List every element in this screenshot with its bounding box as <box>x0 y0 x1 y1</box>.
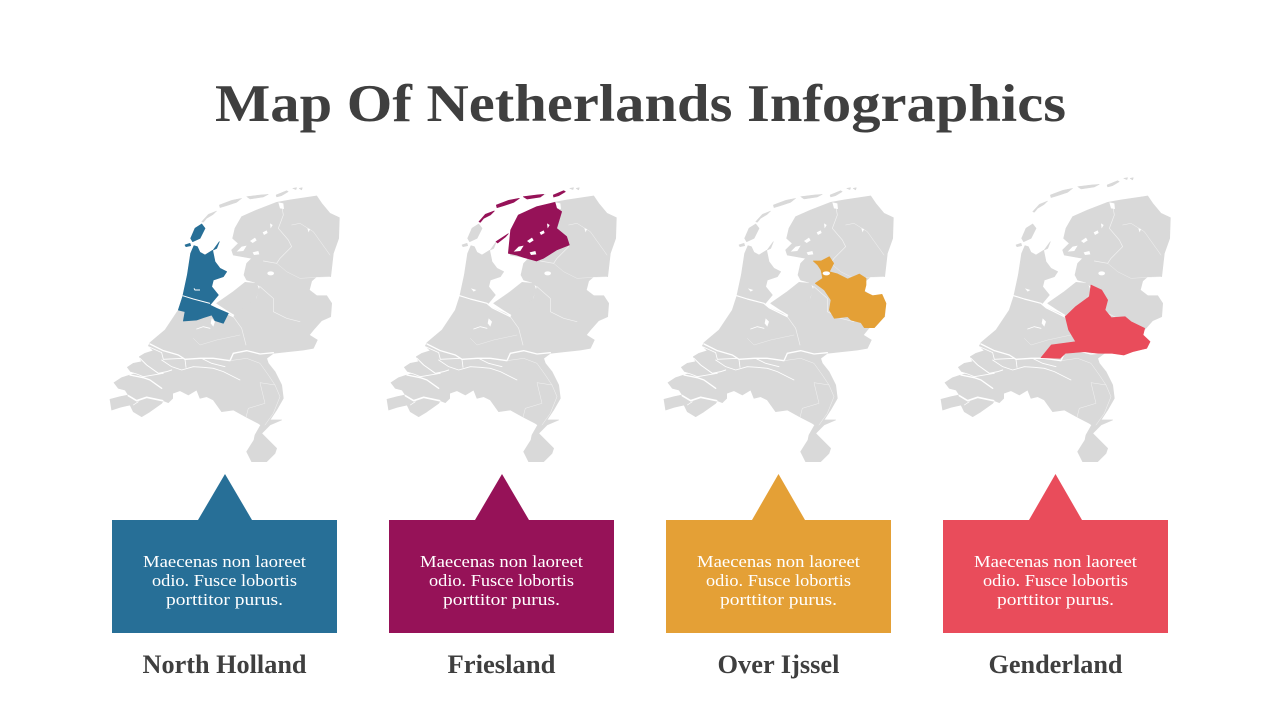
callout text: porttitor purus. <box>443 590 560 609</box>
callout text: porttitor purus. <box>166 590 283 609</box>
callout text: odio. Fusce lobortis <box>152 571 297 590</box>
callout text <box>697 552 860 609</box>
callout text: odio. Fusce lobortis <box>429 571 574 590</box>
callout pointer <box>475 474 529 520</box>
panel: Genderland <box>941 178 1170 679</box>
callout text: odio. Fusce lobortis <box>706 571 851 590</box>
callout text: Maecenas non laoreet <box>974 552 1137 571</box>
callout text: Maecenas non laoreet <box>143 552 306 571</box>
map: Friesland highlighted <box>387 188 616 462</box>
panel: North Holland <box>110 188 339 679</box>
callout text: odio. Fusce lobortis <box>983 571 1128 590</box>
callout text: Maecenas non laoreet <box>420 552 583 571</box>
panel: Friesland <box>387 188 616 679</box>
callout text: porttitor purus. <box>997 590 1114 609</box>
map: Genderland highlighted <box>941 178 1170 462</box>
label: Genderland <box>988 650 1123 679</box>
callout text: Maecenas non laoreet <box>697 552 860 571</box>
callout box <box>389 520 614 633</box>
label: North Holland <box>142 650 307 679</box>
callout pointer <box>752 474 805 520</box>
callout text: porttitor purus. <box>720 590 837 609</box>
title: Map Of Netherlands Infographics <box>215 75 1066 133</box>
callout text <box>420 552 583 609</box>
callout pointer <box>198 474 252 520</box>
callout box <box>943 520 1168 633</box>
panel: Over Ijssel <box>664 188 893 679</box>
callout box <box>112 520 337 633</box>
callout pointer <box>1029 474 1082 520</box>
callout text <box>974 552 1137 609</box>
map: North Holland highlighted <box>110 188 339 462</box>
label: Over Ijssel <box>718 650 840 679</box>
map: Over Ijssel highlighted <box>664 188 893 462</box>
callout box <box>666 520 891 633</box>
callout text <box>143 552 306 609</box>
label: Friesland <box>448 650 556 679</box>
